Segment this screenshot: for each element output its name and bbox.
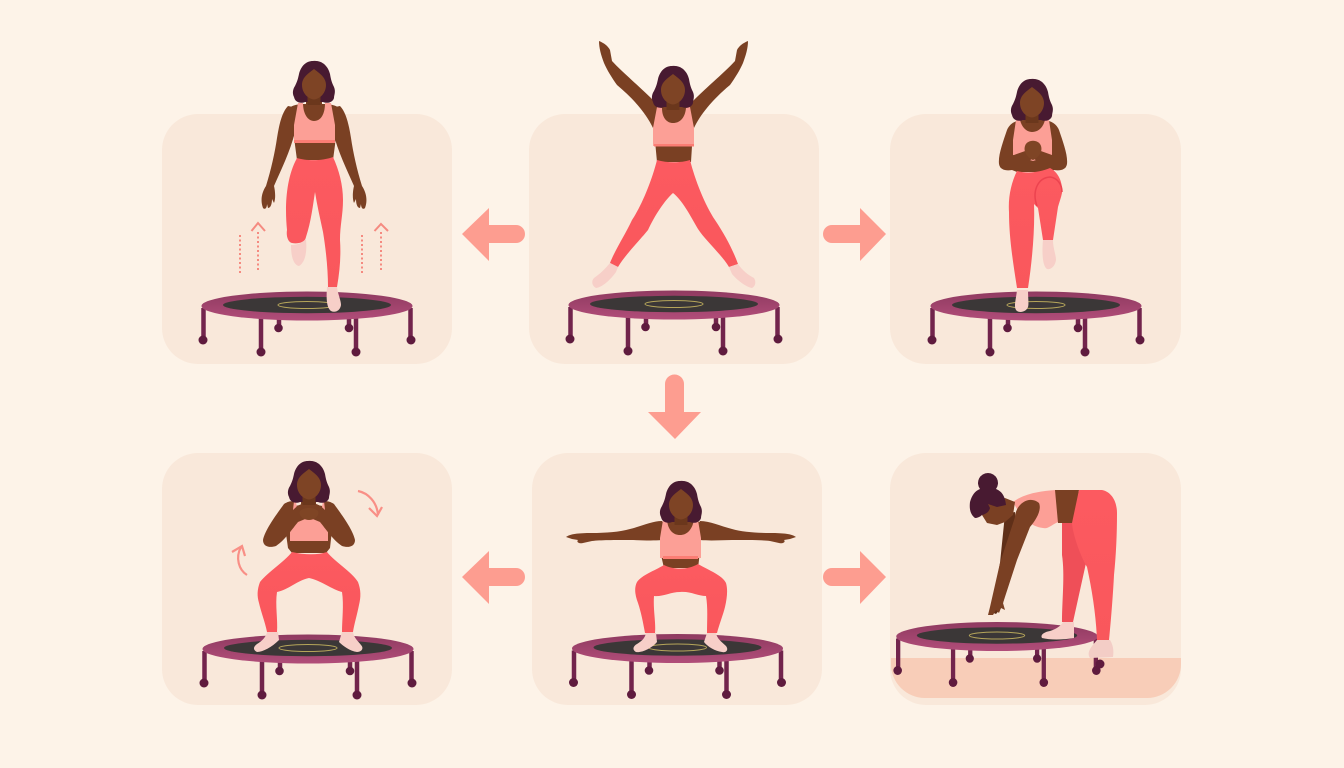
arrow: down from step 2 to step 5 xyxy=(648,374,701,439)
panel: step 6 - forward fold xyxy=(890,453,1181,705)
arrow: right from step 5 to step 6 xyxy=(823,551,886,604)
panel: step 3 - knee raise with hands clasped xyxy=(890,79,1181,364)
trampoline xyxy=(928,292,1144,356)
trampoline xyxy=(893,622,1101,687)
icon: rotation arrows xyxy=(232,491,382,575)
trampoline xyxy=(198,292,416,356)
icon: rebound motion dotted arrows xyxy=(240,223,388,275)
panel: step 4 - squat with clasped hands xyxy=(162,453,452,705)
panel background xyxy=(890,114,1181,364)
panel background xyxy=(162,114,452,364)
figure: woman raising knee xyxy=(999,79,1067,312)
panel: step 1 - single-leg hop xyxy=(162,61,452,364)
panel: step 5 - squat with arms out xyxy=(532,453,822,705)
figure: woman squatting, hands clasped at chest xyxy=(254,461,362,652)
trampoline xyxy=(566,290,782,356)
arrow: left from step 2 to step 1 xyxy=(462,208,525,261)
panel: step 2 - star jump xyxy=(529,41,819,364)
figure: woman squatting, arms extended xyxy=(566,481,796,652)
floor band xyxy=(891,658,1181,698)
far trampoline foot xyxy=(1096,660,1104,668)
arrow: right from step 2 to step 3 xyxy=(823,208,886,261)
figure: woman hopping on one leg xyxy=(262,61,366,312)
hair and bun xyxy=(970,473,1006,518)
trampoline xyxy=(200,634,416,700)
figure: woman bending forward, reaching down xyxy=(970,473,1117,658)
panel background xyxy=(162,453,452,705)
panel background xyxy=(529,114,819,364)
panel background xyxy=(532,453,822,705)
trampoline xyxy=(569,634,786,699)
arrow: left from step 5 to step 4 xyxy=(462,551,525,604)
figure: woman in star jump xyxy=(592,41,755,288)
panel background xyxy=(890,453,1181,705)
